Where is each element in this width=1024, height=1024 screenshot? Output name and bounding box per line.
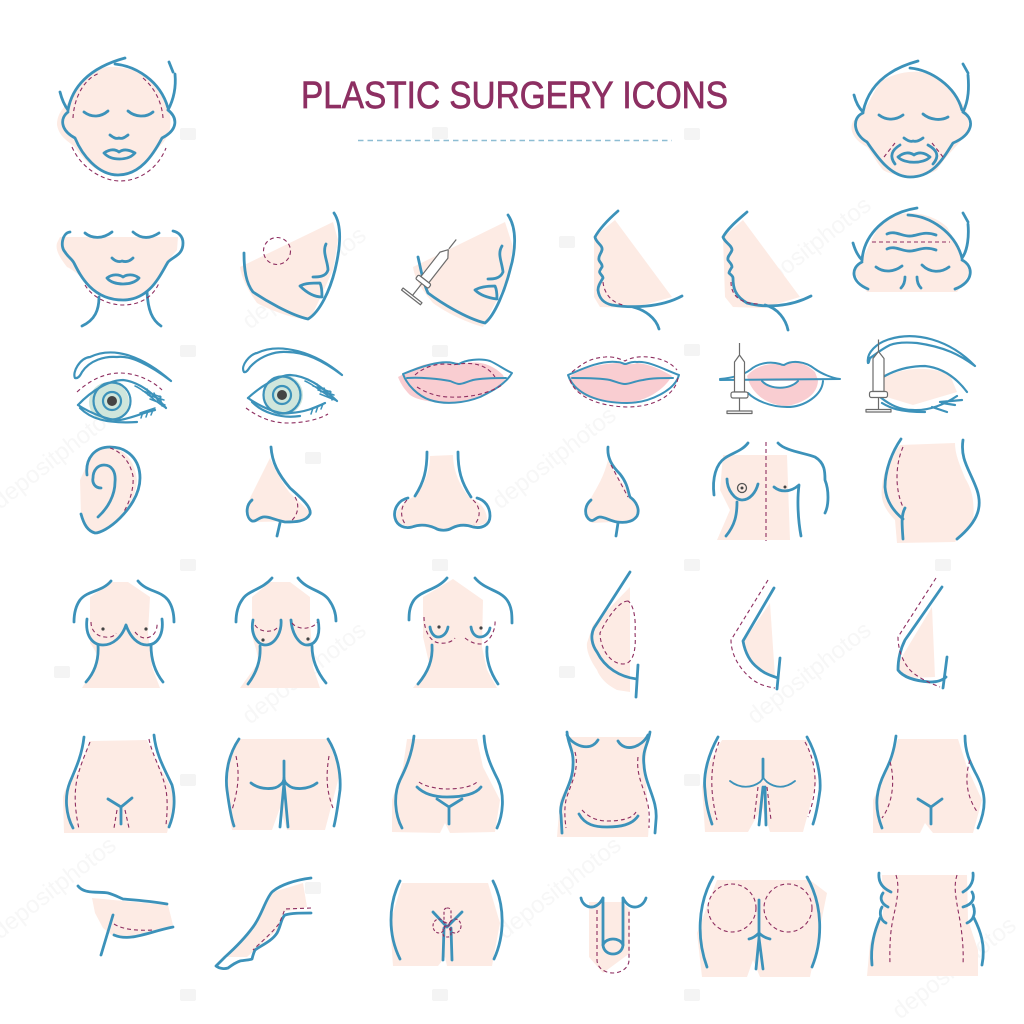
icon: facelift wrinkles xyxy=(851,61,971,177)
syringe xyxy=(866,340,891,412)
watermark: depositphotos xyxy=(237,221,371,335)
skin shape xyxy=(225,739,340,830)
outline xyxy=(853,208,970,289)
outline xyxy=(700,877,820,969)
icon: flank liposuction xyxy=(867,873,983,976)
incision line xyxy=(246,408,328,423)
iris fill xyxy=(263,375,303,415)
outline xyxy=(595,211,682,329)
skin shape xyxy=(851,72,969,176)
icon: upper eyelid surgery xyxy=(74,352,171,422)
icon: male chest xyxy=(713,442,828,541)
lashes xyxy=(135,386,166,418)
incision line xyxy=(264,238,290,264)
incision line xyxy=(290,497,298,522)
incision line xyxy=(897,447,903,507)
incision line xyxy=(424,617,495,644)
icon: nose bridge reduction xyxy=(585,447,638,536)
nipple dots xyxy=(101,627,148,631)
outline xyxy=(705,737,820,825)
outline xyxy=(409,578,512,684)
outline xyxy=(216,878,311,969)
icon: hip and thigh liposuction xyxy=(63,735,175,833)
skin shape xyxy=(240,222,338,320)
icon: lip augmentation xyxy=(568,357,679,407)
incision line xyxy=(402,500,479,525)
incision line xyxy=(597,910,629,973)
outline xyxy=(74,581,174,682)
skin shape xyxy=(413,579,497,688)
outline xyxy=(391,881,502,960)
outline xyxy=(247,447,310,536)
skin shape xyxy=(589,902,630,973)
lip fill xyxy=(568,363,672,403)
incision line xyxy=(884,143,943,157)
lip fill xyxy=(398,362,505,402)
skin shape xyxy=(57,67,171,175)
icon: lower eyelid surgery xyxy=(243,349,342,423)
outline xyxy=(62,231,183,326)
outline xyxy=(877,736,984,828)
outline xyxy=(60,58,175,175)
outline xyxy=(226,739,340,827)
incision line xyxy=(890,875,963,965)
skin shape xyxy=(240,582,320,688)
incision line xyxy=(882,760,978,818)
outline xyxy=(720,362,840,407)
incision line xyxy=(565,752,649,828)
incision line xyxy=(712,742,815,820)
pupil xyxy=(277,390,287,400)
watermark: depositphotos xyxy=(492,831,626,945)
outline xyxy=(244,213,340,319)
skin shape xyxy=(80,448,137,532)
left nipple xyxy=(738,484,746,492)
skin shape xyxy=(247,458,310,522)
skin shape xyxy=(227,883,307,957)
outline xyxy=(403,360,512,403)
icon: forehead lift xyxy=(853,208,970,292)
syringe xyxy=(727,343,752,414)
icon: lip filler injection xyxy=(720,343,840,414)
incision line xyxy=(570,357,678,407)
incision line xyxy=(85,283,159,305)
icon: leg liposuction xyxy=(216,878,311,969)
icon: vaginal surgery xyxy=(390,881,502,966)
incision line xyxy=(114,924,153,930)
outline xyxy=(81,447,140,533)
watermark: depositphotos xyxy=(742,616,876,730)
icon: ear surgery xyxy=(80,447,140,533)
icon: breast lift profile xyxy=(898,578,947,688)
pupil xyxy=(107,396,117,406)
outline xyxy=(78,886,173,955)
icon: buttock augmentation xyxy=(697,877,827,977)
skin shape xyxy=(396,455,487,530)
watermark camera marks xyxy=(54,127,952,1001)
skin shape xyxy=(743,603,775,677)
incision line xyxy=(253,908,311,950)
incision line xyxy=(731,580,775,688)
skin shape xyxy=(702,740,817,832)
incision line xyxy=(611,465,628,497)
incision line xyxy=(110,448,133,513)
icon: chin profile augmentation xyxy=(723,212,811,330)
outline xyxy=(854,61,971,177)
incision line xyxy=(872,241,950,243)
incision line xyxy=(91,622,157,638)
incision line xyxy=(765,442,767,541)
outline xyxy=(868,336,975,412)
icon: abdominal liposuction xyxy=(557,732,656,837)
outline xyxy=(66,735,174,828)
implant outline xyxy=(600,601,635,664)
watermark: depositphotos xyxy=(887,911,1021,1024)
icon: buttock and thigh liposuction xyxy=(702,737,820,832)
outline xyxy=(885,439,979,539)
incision line xyxy=(603,282,623,305)
skin shape xyxy=(594,220,672,308)
incision line xyxy=(232,756,333,810)
skin shape xyxy=(867,875,978,976)
icon: cheek implant xyxy=(240,213,340,320)
outline xyxy=(396,736,502,828)
nipple dots xyxy=(261,637,310,642)
incision line xyxy=(72,73,166,181)
icon: penis surgery xyxy=(581,898,646,973)
syringe xyxy=(402,232,466,305)
nipple dots xyxy=(437,625,483,630)
outline xyxy=(243,349,342,417)
outline xyxy=(586,447,638,536)
icon: cheek filler injection xyxy=(402,215,515,327)
icon: breast augmentation front xyxy=(409,578,512,688)
outline xyxy=(713,443,828,536)
incision line xyxy=(75,739,167,829)
nipple dots xyxy=(740,486,786,490)
lashes xyxy=(305,381,337,414)
outline xyxy=(395,452,490,530)
lip fill xyxy=(747,362,818,406)
skin shape xyxy=(57,237,178,300)
icon: chin and jaw xyxy=(57,231,183,326)
title: PLASTIC SURGERY ICONS xyxy=(301,75,728,117)
incision line xyxy=(898,578,940,687)
skin shape xyxy=(557,737,649,837)
incision line xyxy=(415,363,502,397)
skin shape xyxy=(92,898,173,938)
outline xyxy=(898,587,947,688)
skin shape xyxy=(413,222,513,327)
watermark: depositphotos xyxy=(237,616,371,730)
outline xyxy=(592,572,638,697)
outline xyxy=(74,352,171,422)
skin shape xyxy=(392,739,500,833)
outline xyxy=(723,212,811,330)
teeth gap xyxy=(762,381,798,388)
icon: eyelid filler injection xyxy=(866,336,975,412)
skin shape xyxy=(717,455,790,540)
skin shape xyxy=(880,369,957,405)
icon: breast reduction profile xyxy=(731,580,780,689)
skin shape xyxy=(390,883,500,966)
icon: tummy tuck xyxy=(392,736,502,833)
icon: lip reduction xyxy=(398,360,512,403)
icon: breast lift front xyxy=(74,581,174,688)
skin shape xyxy=(697,880,827,977)
icon: nose front view xyxy=(395,452,490,530)
outline xyxy=(561,732,656,833)
skin shape xyxy=(587,587,630,692)
incision line xyxy=(255,622,317,631)
incision line xyxy=(77,373,162,392)
icon: face contouring xyxy=(57,58,175,181)
outline xyxy=(581,898,646,954)
skin shape xyxy=(854,213,970,292)
incision line xyxy=(731,282,760,304)
icon: arm lift xyxy=(78,886,173,955)
watermark: depositphotos xyxy=(487,401,621,515)
iris fill xyxy=(89,382,129,422)
icon: buttock side liposuction xyxy=(225,739,340,830)
skin shape xyxy=(82,582,160,688)
outline xyxy=(743,588,780,689)
outline xyxy=(418,215,515,323)
watermark: depositphotos xyxy=(742,191,876,305)
incision line xyxy=(419,782,477,789)
skin shape xyxy=(585,460,638,523)
outline xyxy=(872,873,983,965)
skin shape xyxy=(882,443,974,543)
icon: chin profile reduction xyxy=(594,211,682,329)
skin shape xyxy=(63,740,175,833)
icon: breast implant profile xyxy=(587,572,638,697)
icon: outer thigh liposuction xyxy=(873,736,984,833)
skin shape xyxy=(898,607,935,678)
implant outlines xyxy=(708,884,812,932)
icon: nose tip profile xyxy=(247,447,310,536)
incision line xyxy=(433,908,461,937)
outline xyxy=(236,578,336,684)
skin shape xyxy=(873,739,982,833)
icon: breast lift sagging xyxy=(236,578,336,688)
skin shape xyxy=(723,220,800,308)
outline xyxy=(568,362,679,403)
title divider xyxy=(358,140,672,142)
icon: buttock profile xyxy=(882,439,979,543)
